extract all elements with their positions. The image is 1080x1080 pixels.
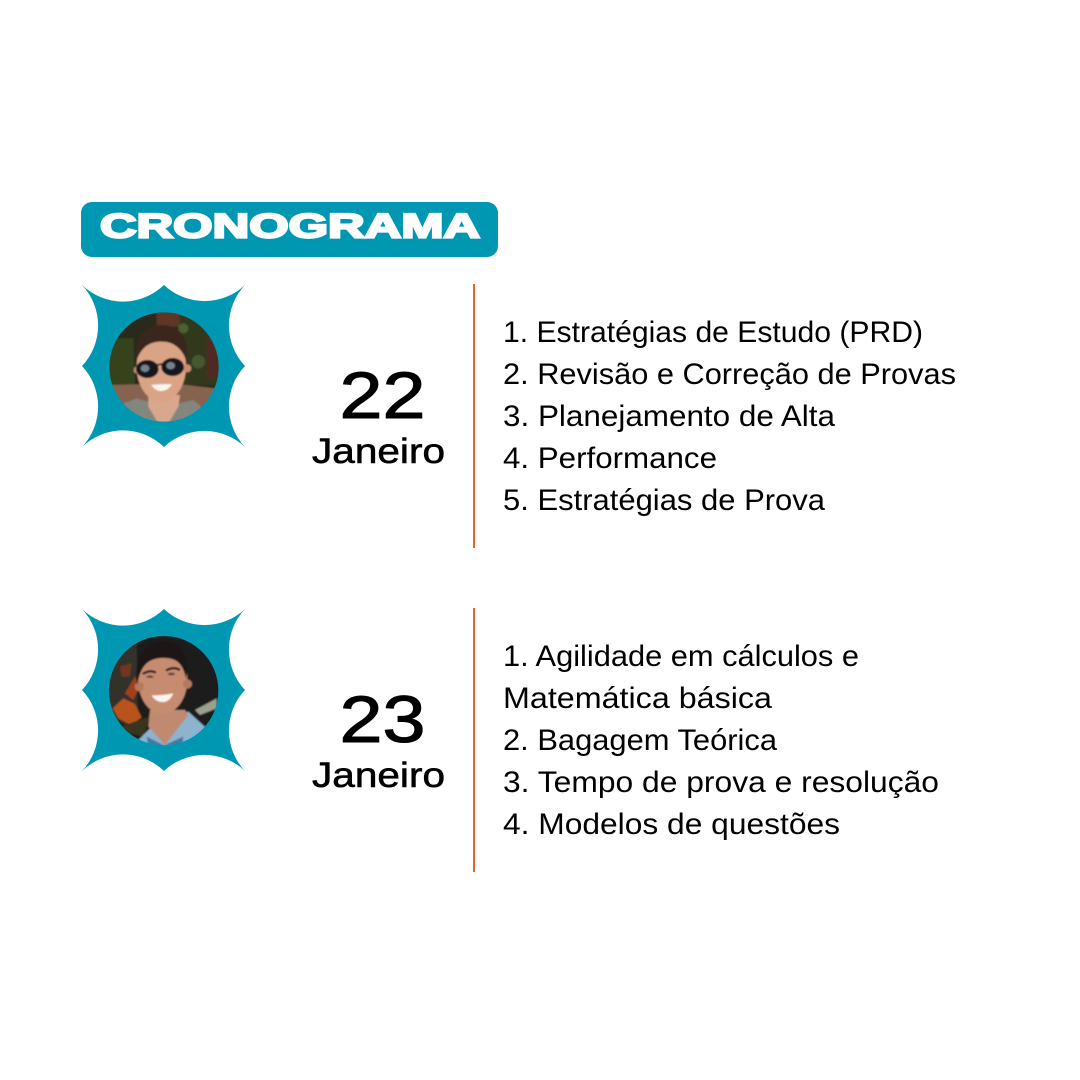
- panel: 23 Janeiro: [82, 608, 939, 872]
- title badge: CRONOGRAMA: [81, 202, 498, 257]
- topic list: [503, 640, 939, 841]
- topic list: Matemática básica: [503, 682, 773, 715]
- divider line: [473, 284, 475, 548]
- topic list: 5. Estratégias de Prova: [503, 484, 826, 517]
- topic list: 1. Agilidade em cálculos e: [503, 640, 859, 673]
- title badge: CRONOGRAMA: CRONOGRAMA: [100, 208, 480, 246]
- topic list: 4. Performance: [503, 442, 717, 475]
- topic list: 2. Bagagem Teórica: [503, 724, 778, 757]
- topic list: [503, 316, 956, 517]
- date: 23: 23: [340, 682, 426, 756]
- topic list: 1. Estratégias de Estudo (PRD): [503, 316, 923, 349]
- topic list: 4. Modelos de questões: [503, 808, 840, 841]
- topic list: 3. Planejamento de Alta: [503, 400, 836, 433]
- icon: teal star badge with portrait 2: [82, 609, 245, 771]
- date: Janeiro: Janeiro: [312, 432, 445, 471]
- date: Janeiro: Janeiro: [312, 756, 445, 795]
- icon: teal star badge with portrait 1: [82, 285, 245, 447]
- topic list: 2. Revisão e Correção de Provas: [503, 358, 956, 391]
- panel: 22 Janeiro: [82, 284, 956, 548]
- topic list: 3. Tempo de prova e resolução: [503, 766, 939, 799]
- divider line: [473, 608, 475, 872]
- date: 22: 22: [340, 358, 426, 432]
